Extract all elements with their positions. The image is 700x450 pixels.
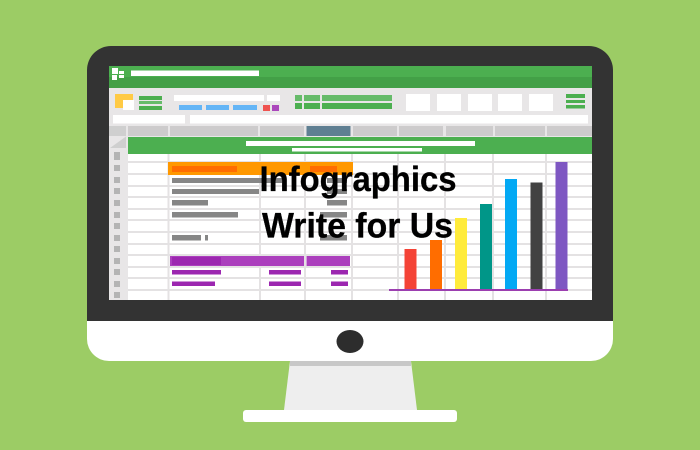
icon: monitor stand	[243, 361, 457, 422]
green sheet header	[128, 137, 592, 154]
panel: spreadsheet screen	[109, 66, 592, 300]
orange table header	[168, 162, 353, 175]
grid	[128, 154, 592, 300]
row number markers	[114, 152, 120, 298]
title: Infographics	[260, 159, 456, 199]
grey table rows	[172, 178, 347, 240]
bar chart	[389, 162, 568, 291]
title bar	[109, 66, 592, 88]
icon: monitor body	[87, 46, 613, 361]
column headers	[109, 126, 592, 148]
toolbar	[113, 94, 588, 124]
title	[260, 159, 456, 246]
purple table	[170, 256, 350, 286]
title: Write for Us	[262, 206, 453, 246]
